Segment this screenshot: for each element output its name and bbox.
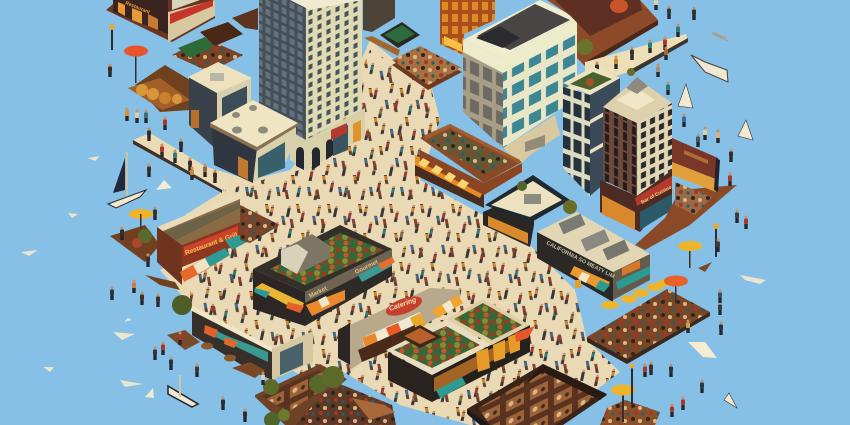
bottom food hall (467, 364, 607, 425)
low building with striped awning (167, 295, 313, 380)
bottom left planter deck and trees (255, 364, 396, 425)
top centre decks and green roof (363, 0, 462, 90)
central market block (253, 225, 395, 326)
small building with flat roof, back (188, 62, 252, 150)
right deck with umbrellas (587, 223, 719, 364)
large white office building (463, 0, 577, 165)
orange lit building (440, 0, 495, 55)
top right deck with burger (547, 0, 658, 68)
small building with flat roof, front (210, 100, 298, 183)
catering storefront with oval sign (338, 288, 463, 370)
plaza ground with crowd (135, 40, 620, 425)
left restaurant with red signage: Restaurant & Grill (184, 231, 239, 257)
people in water, left side (108, 64, 265, 422)
orange awning patio building (415, 124, 522, 208)
central market block: Gourmet (354, 259, 379, 276)
top food decks (128, 8, 258, 112)
brown and cream high-rise (600, 77, 673, 232)
central market block: Market (308, 286, 328, 300)
produce market hall (386, 299, 535, 402)
brown and cream high-rise: Bar of Cuisine (640, 184, 673, 206)
cream pier (585, 34, 688, 78)
left restaurant with red signage (110, 193, 280, 290)
California corner shop with rooftop units: CALIFORNIA SO MEATY LIM (545, 240, 616, 280)
people in water, right side (643, 0, 748, 417)
catering storefront with oval sign: Catering (388, 296, 418, 313)
top-left restaurant on deck: Restaurant (124, 0, 151, 16)
orange market umbrella top-left (109, 24, 148, 83)
top-left restaurant on deck (106, 0, 215, 42)
glass tower with planted roof (563, 67, 620, 196)
right billboard shop and deck (635, 138, 737, 250)
left lit shop (483, 175, 577, 247)
boats and sailboats (21, 32, 766, 408)
left cream dock (133, 133, 228, 193)
tall tower (259, 0, 365, 170)
California corner shop with rooftop units (537, 212, 650, 302)
bottom right deck with umbrella (600, 364, 660, 425)
